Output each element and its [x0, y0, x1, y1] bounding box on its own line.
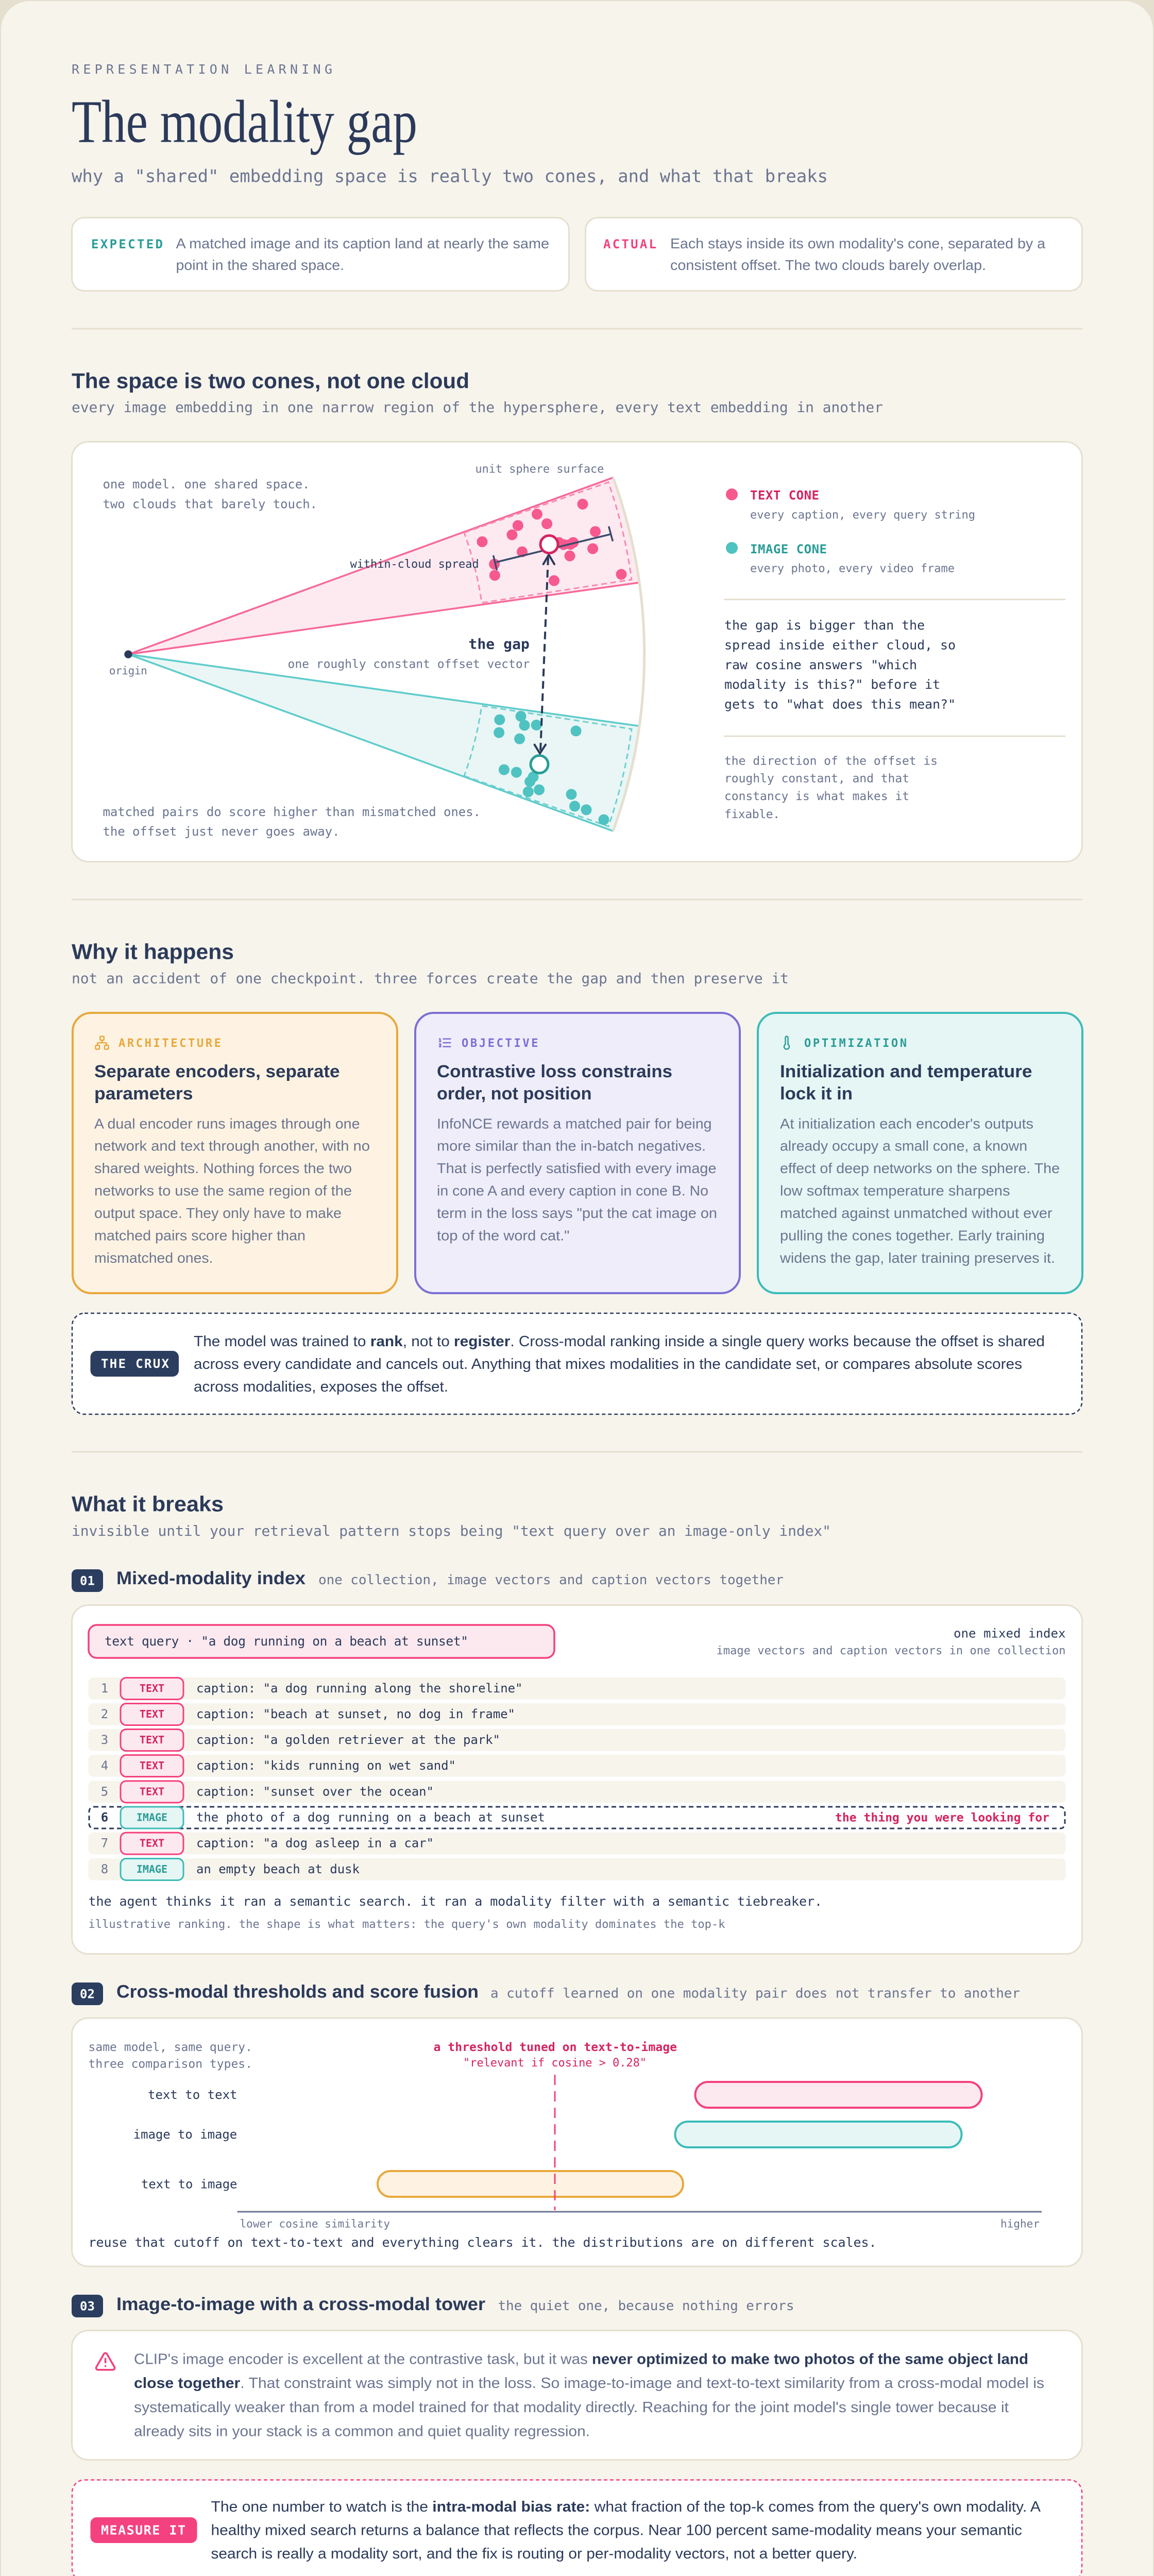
- badge: measure it: MEASURE IT: [101, 2522, 185, 2538]
- row 6: the match: the thing you were looking for: [835, 1811, 1049, 1825]
- objective body: more similar than the in-batch negatives.: [437, 1138, 706, 1154]
- panel: cone diagram: [72, 442, 1082, 861]
- badge 01: 01: [80, 1573, 95, 1588]
- legend: image cone: [726, 542, 955, 575]
- threshold line: [554, 2075, 555, 2210]
- panel: threshold chart: [72, 2018, 1082, 2266]
- crux text: across every candidate and cancels out. Anything that mixes modalities in the candidate set, or compares absolute scores: [194, 1356, 1022, 1372]
- offset note: constancy is what makes it: [724, 790, 909, 803]
- expected text: point in the shared space.: [176, 257, 344, 273]
- bar: image to image: image to image: [133, 2127, 237, 2142]
- row 8: IMAGE: [137, 1863, 167, 1875]
- callout: measure it: [72, 2480, 1082, 2576]
- row 6: the match: IMAGE: [137, 1811, 167, 1824]
- icon: thermometer: [784, 1037, 789, 1049]
- crux text: [194, 1333, 1045, 1395]
- row 1: caption: "a dog running along the shoreline": [196, 1681, 522, 1696]
- quiet failure text: [134, 2351, 1044, 2440]
- optimization body: matched against unmatched without ever: [780, 1205, 1052, 1221]
- title: The modality gap: [72, 88, 417, 156]
- axis: lower cosine similarity: [240, 2217, 390, 2230]
- note bottom: matched pairs do score higher than mismatched ones.: [103, 805, 481, 819]
- icon: warning: [96, 2353, 115, 2370]
- actual label: ACTUAL: [603, 237, 656, 251]
- badge 01: [72, 1569, 103, 1592]
- note bottom: [103, 805, 481, 839]
- label: spread: within-cloud spread: [350, 558, 479, 571]
- heading: mixed-modality index: Mixed-modality index: [116, 1568, 306, 1588]
- row 8: [89, 1858, 1065, 1880]
- architecture body: shared weights. Nothing forces the two: [94, 1160, 352, 1176]
- architecture label: ARCHITECTURE: [118, 1037, 221, 1050]
- label: origin: origin: [109, 665, 147, 677]
- label: the gap: the gap: [468, 636, 530, 652]
- badge: the crux: THE CRUX: [101, 1357, 169, 1371]
- row 2: 2: [101, 1707, 108, 1721]
- badge 03: 03: [80, 2299, 95, 2313]
- row 1: [89, 1677, 1065, 1700]
- eyebrow: REPRESENTATION LEARNING: [72, 62, 332, 77]
- chart note: three comparison types.: [89, 2058, 252, 2071]
- objective body: top of the word cat.": [437, 1227, 570, 1244]
- text cloud dots: [477, 499, 626, 586]
- text centroid: [540, 536, 558, 553]
- row 2: TEXT: [140, 1708, 164, 1720]
- row 4: TEXT: [140, 1759, 164, 1772]
- arrow: the gap: [535, 555, 554, 753]
- heading: what it breaks: What it breaks: [72, 1492, 224, 1516]
- offset note: fixable.: [724, 808, 780, 821]
- optimization title: [780, 1062, 1032, 1104]
- chart takeaway: reuse that cutoff on text-to-text and everything clears it. the distributions are on different scales.: [89, 2235, 877, 2250]
- subheading: why: not an accident of one checkpoint. three forces create the gap and then preserve it: [72, 970, 789, 987]
- image cloud dots: [494, 711, 609, 825]
- image centroid: [531, 755, 548, 773]
- unit sphere arc: [613, 478, 644, 831]
- expected text: A matched image and its caption land at nearly the same: [176, 235, 549, 251]
- optimization body: effect of deep networks on the sphere. The: [780, 1160, 1060, 1176]
- takeaway text: the gap is bigger than the: [724, 618, 925, 633]
- legend: text cone: TEXT CONE: [750, 488, 819, 502]
- architecture title: Separate encoders, separate: [94, 1062, 340, 1081]
- bar: text to image: [141, 2171, 683, 2197]
- chart note: same model, same query.: [89, 2041, 252, 2054]
- architecture body: output space. They only have to make: [94, 1205, 342, 1221]
- optimization title: Initialization and temperature: [780, 1062, 1032, 1081]
- row 5: caption: "sunset over the ocean": [196, 1784, 434, 1799]
- panel: optimization: [758, 1013, 1082, 1293]
- subheading: what it breaks: invisible until your retrieval pattern stops being "text query over an image-only index": [72, 1522, 831, 1539]
- takeaway text: spread inside either cloud, so: [724, 638, 956, 652]
- text cone wedge: [128, 478, 638, 654]
- quiet failure text: close together . That constraint was simply not in the loss. So image-to-image and text-to-text similarity from a cross-modal model is: [134, 2375, 1044, 2392]
- architecture title: parameters: [94, 1084, 193, 1104]
- query box: text query · "a dog running on a beach at sunset": [105, 1634, 468, 1649]
- row 5: 5: [101, 1784, 108, 1799]
- row 7: TEXT: [140, 1837, 164, 1850]
- label: unit sphere: unit sphere surface: [475, 463, 604, 476]
- architecture body: network and text through another, with no: [94, 1138, 370, 1154]
- note bottom: the offset just never goes away.: [103, 824, 340, 839]
- expected label: EXPECTED: [91, 237, 163, 251]
- optimization label: OPTIMIZATION: [804, 1037, 907, 1050]
- actual text: consistent offset. The two clouds barely overlap.: [670, 257, 986, 273]
- within-cloud spread bar: [494, 527, 613, 570]
- crux text: The model was trained to rank, not to register. Cross-modal ranking inside a single query works because the offset is shared: [194, 1333, 1045, 1350]
- subheading: mixed-modality: one collection, image vectors and caption vectors together: [318, 1572, 784, 1588]
- offset note: the direction of the offset is: [724, 754, 938, 768]
- takeaway text: modality is this?" before it: [724, 677, 940, 692]
- row 5: [89, 1781, 1065, 1803]
- row 1: 1: [101, 1681, 108, 1696]
- objective title: order, not position: [437, 1084, 591, 1104]
- bar: text to text: [148, 2082, 982, 2108]
- note top: two clouds that barely touch.: [103, 497, 317, 511]
- measure text: search is really a modality sort, and the fix is routing or per-modality vectors, not a better query.: [211, 2546, 857, 2562]
- panel: actual: [585, 217, 1082, 291]
- query box: [89, 1625, 554, 1658]
- objective title: [437, 1062, 672, 1104]
- subheading: two cones: every image embedding in one narrow region of the hypersphere, every text embedding in another: [72, 399, 883, 416]
- row 7: 7: [101, 1836, 108, 1851]
- architecture title: [94, 1062, 340, 1104]
- index label: one mixed index: [954, 1626, 1065, 1640]
- objective body: That is perfectly satisfied with every image: [437, 1160, 716, 1176]
- quiet failure text: already sits in your stack is a common and quiet quality regression.: [134, 2424, 590, 2440]
- panel: architecture: [73, 1013, 397, 1293]
- objective body: in cone A and every caption in cone B. No: [437, 1183, 708, 1198]
- panel: objective: [415, 1013, 740, 1293]
- optimization body: widens the gap, later training preserves it.: [779, 1250, 1055, 1266]
- panel: mixed-modality ranking: [72, 1605, 1082, 1954]
- bar: text to text: text to text: [148, 2088, 237, 2102]
- row 3: caption: "a golden retriever at the park": [196, 1733, 500, 1747]
- actual text: Each stays inside its own modality's cone, separated by a: [670, 235, 1045, 251]
- architecture body: matched pairs score higher than: [94, 1227, 306, 1244]
- optimization body: At initialization each encoder's outputs: [780, 1116, 1033, 1132]
- optimization body: low softmax temperature sharpens: [780, 1183, 1010, 1198]
- offset note: [724, 754, 938, 821]
- bar: image to image: [133, 2122, 962, 2147]
- row 8: 8: [101, 1862, 108, 1876]
- legend: image cone: every photo, every video frame: [750, 563, 955, 575]
- row 7: [89, 1833, 1065, 1854]
- objective body: InfoNCE rewards a matched pair for being: [437, 1116, 712, 1132]
- offset note: roughly constant, and that: [724, 772, 909, 786]
- subheading: cross-modal: a cutoff learned on one modality pair does not transfer to another: [490, 1986, 1020, 2001]
- label: offset vector: one roughly constant offset vector: [287, 657, 530, 671]
- icon: ordered list: [439, 1039, 450, 1047]
- row 2: caption: "beach at sunset, no dog in frame": [196, 1707, 515, 1721]
- architecture body: A dual encoder runs images through one: [94, 1116, 360, 1132]
- objective title: Contrastive loss constrains: [437, 1062, 672, 1081]
- actual text: [670, 235, 1045, 273]
- quiet failure text: systematically weaker than from a model trained for that modality directly. Reaching for the joint model's single tower because it: [134, 2399, 1009, 2416]
- row 7: caption: "a dog asleep in a car": [196, 1836, 434, 1851]
- heading: why it happens: Why it happens: [72, 940, 234, 963]
- row 1: TEXT: [140, 1682, 164, 1694]
- row 6: the match: 6: [101, 1810, 108, 1825]
- legend: text cone: every caption, every query string: [750, 509, 975, 522]
- threshold label: a threshold tuned on text-to-image: [434, 2041, 677, 2054]
- axis: higher: [1000, 2217, 1040, 2230]
- panel: quiet failure: [72, 2331, 1082, 2460]
- panel: expected: [72, 217, 569, 291]
- measure text: [211, 2499, 1041, 2562]
- subheading: image-to-image: the quiet one, because nothing errors: [498, 2298, 794, 2314]
- measure text: healthy mixed search returns a balance that reflects the corpus. Near 100 percent same-modality means your semantic: [211, 2522, 1022, 2539]
- badge 03: [72, 2295, 103, 2317]
- threshold label: [434, 2041, 677, 2070]
- index label: image vectors and caption vectors in one collection: [716, 1645, 1065, 1657]
- takeaway text: [724, 618, 956, 712]
- optimization body: [779, 1116, 1060, 1266]
- badge 02: 02: [80, 1987, 95, 2001]
- row 3: [89, 1729, 1065, 1751]
- heading: cross-modal thresholds: Cross-modal thresholds and score fusion: [116, 1981, 479, 2002]
- architecture body: networks to use the same region of the: [94, 1183, 352, 1198]
- optimization body: pulling the cones together. Early training: [780, 1227, 1045, 1244]
- index label: [716, 1626, 1065, 1657]
- optimization title: lock it in: [780, 1084, 853, 1104]
- measure text: The one number to watch is the intra-modal bias rate: what fraction of the top-k comes from the query's own modality. A: [211, 2499, 1041, 2515]
- badge 02: [72, 1982, 103, 2005]
- legend: image cone: IMAGE CONE: [750, 542, 827, 556]
- optimization body: already occupy a small cone, a known: [780, 1138, 1027, 1154]
- architecture body: mismatched ones.: [94, 1250, 213, 1266]
- heading: two cones: The space is two cones, not one cloud: [72, 369, 469, 393]
- threshold label: "relevant if cosine > 0.28": [463, 2057, 647, 2070]
- heading: image-to-image: Image-to-image with a cross-modal tower: [116, 2294, 485, 2314]
- note top: one model. one shared space.: [103, 477, 310, 492]
- note top: [103, 477, 317, 511]
- row 6: the match: [89, 1807, 1065, 1828]
- architecture body: [94, 1116, 370, 1266]
- axis: [237, 2212, 1042, 2230]
- icon: network: [96, 1037, 108, 1049]
- row 8: an empty beach at dusk: [196, 1862, 360, 1876]
- legend: text cone: [726, 488, 975, 522]
- quiet failure text: CLIP's image encoder is excellent at the contrastive task, but it was never optimized to make two photos of the same object land: [134, 2351, 1028, 2368]
- origin point: [124, 650, 132, 658]
- subtitle: why a "shared" embedding space is really two cones, and what that breaks: [72, 166, 828, 187]
- row 2: [89, 1703, 1065, 1725]
- ranking footnote: illustrative ranking. the shape is what matters: the query's own modality dominates the top-k: [89, 1918, 725, 1931]
- row 4: [89, 1755, 1065, 1777]
- expected text: [176, 235, 549, 273]
- badge: measure it: [91, 2517, 197, 2543]
- objective body: term in the loss says "put the cat image on: [437, 1205, 717, 1221]
- objective label: OBJECTIVE: [462, 1037, 538, 1050]
- crux text: across modalities, exposes the offset.: [194, 1379, 448, 1395]
- row 3: TEXT: [140, 1734, 164, 1746]
- row 3: 3: [101, 1733, 108, 1747]
- takeaway text: gets to "what does this mean?": [724, 697, 956, 712]
- bar: text to image: text to image: [141, 2177, 237, 2192]
- row 6: the match: the photo of a dog running on a beach at sunset: [196, 1810, 545, 1825]
- row 5: TEXT: [140, 1785, 164, 1798]
- row 4: caption: "kids running on wet sand": [196, 1758, 456, 1773]
- badge: the crux: [91, 1351, 179, 1377]
- ranking takeaway: the agent thinks it ran a semantic search. it ran a modality filter with a semantic tiebreaker.: [89, 1894, 822, 1909]
- chart note: [89, 2041, 252, 2071]
- callout: the crux: [72, 1313, 1082, 1414]
- takeaway text: raw cosine answers "which: [724, 657, 917, 672]
- image cone wedge: [128, 654, 638, 831]
- row 4: 4: [101, 1758, 108, 1773]
- objective body: [437, 1116, 717, 1244]
- header: [72, 62, 828, 187]
